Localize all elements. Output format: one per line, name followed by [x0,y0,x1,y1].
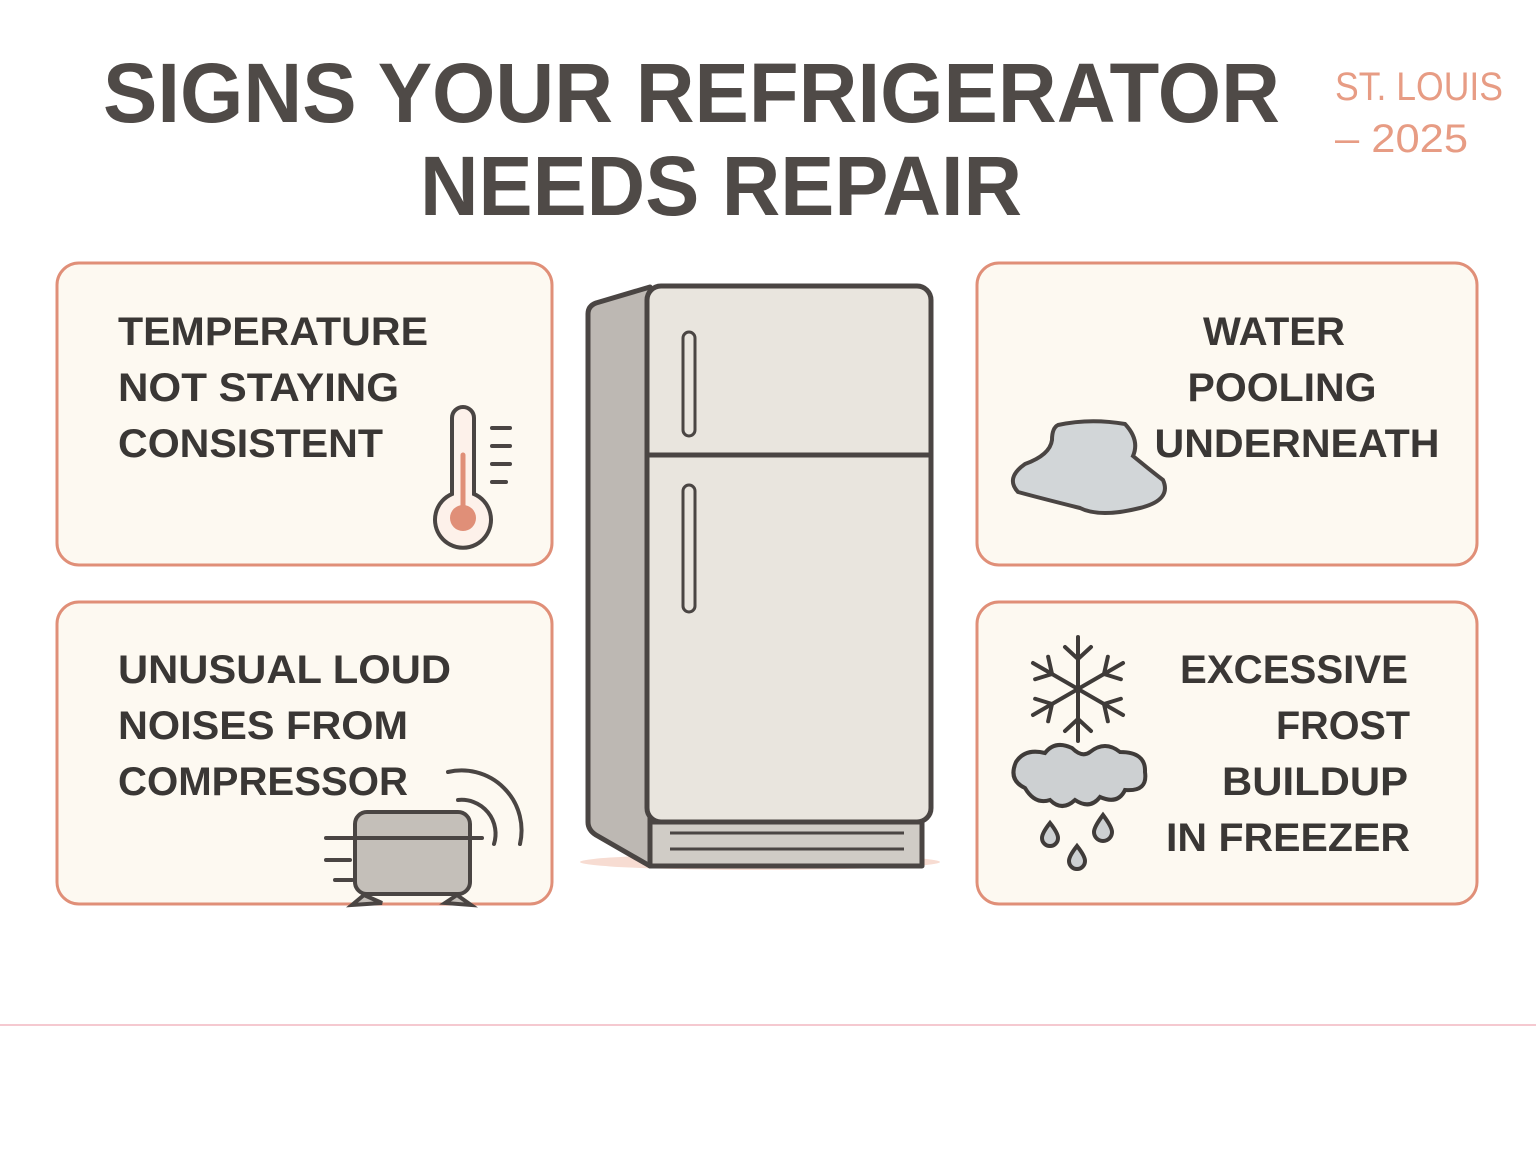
text: water pooling: POOLING [1188,366,1376,410]
icon: puddle [1013,421,1165,513]
text: frost: FROST [1276,704,1410,748]
subtitle: location and year: ST. LOUIS [1335,65,1503,109]
title [103,46,1280,233]
title: NEEDS REPAIR [420,139,1022,233]
title: SIGNS YOUR REFRIGERATOR [103,46,1280,140]
text: temperature: CONSISTENT [118,422,383,466]
text: water pooling [1154,310,1440,466]
text: frost: BUILDUP [1222,760,1408,804]
panel: temperature [57,263,552,565]
icon: thermometer [435,407,510,548]
panel: noises [57,602,552,905]
text: water pooling: WATER [1203,310,1345,354]
icon: compressor [326,770,522,905]
text: frost: IN FREEZER [1166,816,1410,860]
panel: water pooling [977,263,1477,565]
text: temperature: NOT STAYING [118,366,399,410]
text: frost [1166,648,1410,860]
icon: snowflake [1026,637,1130,741]
subtitle: location and year: – 2025 [1335,117,1468,161]
text: water pooling: UNDERNEATH [1154,422,1440,466]
text: frost: EXCESSIVE [1180,648,1408,692]
subtitle: location and year [1335,65,1503,161]
text: noises: UNUSUAL LOUD [118,648,451,692]
text: noises [118,648,451,804]
icon: cloud and drops [1013,745,1145,869]
fridge illustration [580,286,940,870]
panel: frost [977,602,1477,904]
text: noises: COMPRESSOR [118,760,408,804]
text: temperature: TEMPERATURE [118,310,428,354]
text: temperature [118,310,428,466]
text: noises: NOISES FROM [118,704,408,748]
